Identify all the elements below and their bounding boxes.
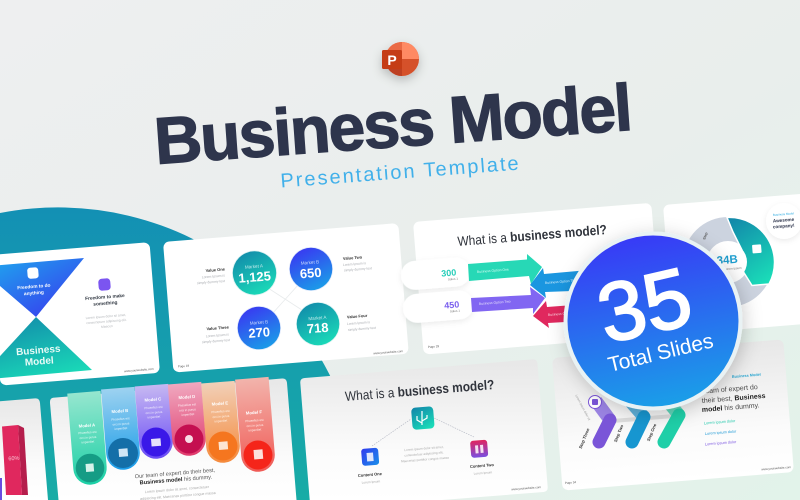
panel: bar chart slide <box>0 398 48 500</box>
chevron: blue <box>630 401 644 442</box>
pill 300: 300 <box>441 267 457 279</box>
callout bubble: Business Model <box>773 211 795 217</box>
column: model D: Phasellus est <box>178 402 196 408</box>
market C circle: Market B <box>250 319 268 326</box>
website: www.yourwebsite.com <box>124 367 154 373</box>
value three <box>202 324 230 344</box>
donut centre value: 34B <box>716 254 738 267</box>
centre description <box>401 445 449 463</box>
total slides label: Total Slides <box>606 329 716 377</box>
market D circle: 718 <box>306 320 329 336</box>
body text: Our team of expert do <box>690 384 758 396</box>
subtitle: Presentation Template <box>280 153 521 192</box>
arrow: blue: Business Option Three <box>545 278 580 285</box>
coloured list: Lorem ipsum dolor <box>705 440 737 446</box>
coloured list: Lorem ipsum dolor <box>705 429 737 436</box>
PowerPoint icon <box>382 42 419 76</box>
heading: What is a business model? <box>344 376 495 404</box>
market B circle <box>289 247 333 291</box>
badge: 35 total slides <box>564 232 742 410</box>
value three: Lorem Ipsum is <box>206 332 229 338</box>
coloured list <box>704 419 737 446</box>
lower triangle <box>0 317 92 380</box>
bar: red 60 percent: 60% <box>8 456 20 462</box>
footer <box>565 465 792 485</box>
freedom description <box>85 313 127 329</box>
panel: chevron steps slide <box>552 339 794 491</box>
step labels: Step One <box>646 422 658 442</box>
panel: six model columns slide <box>50 377 296 500</box>
value four: Value Four <box>347 313 368 319</box>
content two label: Lorem Ipsum <box>473 470 493 476</box>
column: model F: Model F <box>246 409 263 416</box>
freedom heading: Freedom to make <box>85 293 125 302</box>
market D circle: Market A <box>308 315 328 321</box>
icon: content one tile <box>361 448 379 466</box>
market A circle <box>232 250 277 296</box>
callout bubble: company! <box>773 223 795 229</box>
content one label: Lorem Ipsum <box>361 479 381 485</box>
column: model D: orci in purus <box>179 407 196 413</box>
donut centre value <box>716 254 742 271</box>
column: model B: Phasellus est <box>111 416 130 422</box>
number 35: 35 <box>589 250 700 361</box>
column: model B: Model B <box>111 408 128 414</box>
panel: donut slide <box>663 191 800 335</box>
team text: Business model his dummy. <box>139 475 213 486</box>
body text: model his dummy. <box>702 402 760 414</box>
footer: Page 19 <box>178 364 190 368</box>
market D circle <box>296 302 340 346</box>
team text: Our team of expert do their best, <box>135 468 216 480</box>
body text: their best, Business <box>702 393 766 405</box>
value two: simply dummy text <box>344 266 372 272</box>
icon: centre tile <box>411 406 435 430</box>
value three: Value Three <box>206 324 230 331</box>
value two <box>343 254 372 272</box>
donut centre value: Lorem ipsum <box>724 266 742 271</box>
teal background arc <box>0 207 362 500</box>
icon: purple tile <box>98 278 111 291</box>
freedom description: consectetuer adipiscing elit. <box>86 318 127 325</box>
column: model B: orci in purus <box>112 421 130 427</box>
team text <box>135 468 216 500</box>
column: model A <box>67 391 108 486</box>
donut chart: Step <box>702 232 709 240</box>
PowerPoint icon: P <box>387 52 397 68</box>
freedom description: Lorem ipsum dolor sit amet, <box>85 313 126 320</box>
step note: Lorem ipsum dolor sit <box>574 394 591 421</box>
value four <box>347 313 376 332</box>
heading: What is a business model? <box>457 221 608 249</box>
coloured list: Lorem ipsum dolor <box>704 419 736 425</box>
centre description: consectetuer adipiscing elit. <box>404 450 444 458</box>
arrow: red <box>533 301 600 328</box>
centre description: Maecenas porttitor congue massa <box>401 456 449 463</box>
title: Business Model <box>152 70 633 178</box>
freedom description: Maecen <box>101 324 113 329</box>
column: model C <box>135 384 174 460</box>
content two label: Content Two <box>470 462 495 469</box>
business model label <box>16 344 61 369</box>
arrow: teal <box>468 254 542 284</box>
column: model C: imperdiet <box>147 414 161 420</box>
column: model B <box>101 387 141 471</box>
column: model C: Model C <box>144 396 161 403</box>
arrow: red: Business Option Four <box>548 310 581 317</box>
footer: Page 34 <box>565 480 577 485</box>
icon: content two tile <box>470 440 488 458</box>
column: model A: orci in purus <box>79 435 97 440</box>
content two label <box>470 462 495 476</box>
value four: Lorem Ipsum is <box>347 320 370 326</box>
website: www.yourwebsite.com <box>511 485 542 491</box>
pill 300 <box>400 256 471 291</box>
market B circle: 650 <box>299 265 322 281</box>
column: model D: Model D <box>178 394 195 400</box>
arrow: purple <box>471 287 545 314</box>
step labels <box>578 422 658 449</box>
arrow: blue <box>530 268 600 298</box>
market C circle: 270 <box>248 324 271 341</box>
value one <box>197 266 226 285</box>
column: model E <box>201 381 241 464</box>
value four: simply dummy text <box>348 326 376 332</box>
icon: step badge <box>588 396 602 408</box>
body text <box>690 384 766 414</box>
column: model D <box>168 382 207 457</box>
column: model E: Model E <box>211 400 228 407</box>
column: model F: Phasellus est <box>245 418 264 423</box>
triangle label: Freedom to do <box>17 283 51 291</box>
page number: Page 29 <box>428 344 440 349</box>
freedom heading: something <box>93 300 118 308</box>
column: model E: Phasellus est <box>211 409 230 414</box>
column: model C: Phasellus est <box>144 405 163 410</box>
value one: Value One <box>205 266 226 273</box>
footer: www.yourwebsite.com <box>373 349 404 355</box>
content one label <box>358 471 383 485</box>
market C circle <box>237 306 281 350</box>
arrow: teal: Business Option One <box>477 267 509 274</box>
value two: Value Two <box>343 254 363 261</box>
heading label: Business Model <box>732 373 761 379</box>
step labels: Step Three <box>578 427 591 449</box>
arrow: purple: Business Option Two <box>479 299 511 306</box>
column: model F <box>235 377 276 473</box>
callout bubble <box>766 203 800 239</box>
value two: Lorem Ipsum is <box>343 261 366 267</box>
team text: Lorem ipsum dolor sit amet, consectetuer <box>145 485 210 494</box>
panel: content network slide <box>300 359 548 500</box>
column: model D: imperdiet <box>181 412 195 417</box>
callout bubble: Awesome <box>773 217 795 223</box>
panel: hourglass slide <box>0 242 160 386</box>
pill 450: 450 <box>444 299 460 311</box>
market A circle: Market A <box>245 263 264 270</box>
pill 450: Sales 1 <box>450 309 460 313</box>
donut chart <box>695 217 775 295</box>
value one: simply dummy text <box>197 279 225 285</box>
step labels: Step Two <box>613 424 625 443</box>
chevron: purple <box>596 401 610 442</box>
value one: Lorem Ipsum is <box>202 273 225 279</box>
business model label: Business <box>16 344 61 358</box>
column: model A: Phasellus est <box>78 430 97 435</box>
footer: www.yourwebsite.com <box>761 465 792 471</box>
column: model A: imperdiet <box>81 439 95 445</box>
footer <box>178 349 404 368</box>
market A circle: 1,125 <box>238 268 271 286</box>
panel: what is a business model arrows <box>400 203 662 355</box>
column: model B: imperdiet <box>114 426 128 431</box>
column: model C: orci in purus <box>145 410 163 415</box>
chevron: teal <box>664 398 679 442</box>
column: model E: orci in purus <box>212 414 230 419</box>
panel: market circles slide <box>163 223 409 373</box>
column: model E: imperdiet <box>214 418 228 424</box>
market B circle: Market B <box>301 259 319 266</box>
value three: simply dummy text <box>202 338 230 344</box>
column: model F: orci in purus <box>246 423 264 428</box>
inverted triangle <box>0 258 84 317</box>
column: model A: Model A <box>78 422 95 429</box>
centre description: Lorem ipsum dolor sit amet, <box>404 445 444 452</box>
content one label: Content One <box>358 471 383 478</box>
pill 450 <box>402 289 474 324</box>
icon: infinity tile <box>27 267 39 279</box>
freedom heading <box>85 293 125 308</box>
bar: purple <box>0 478 2 500</box>
triangle label <box>17 283 51 297</box>
pill 300: Sales 1 <box>448 277 458 281</box>
triangle label: anything <box>24 290 44 297</box>
column: model F: imperdiet <box>248 427 262 433</box>
business model label: Model <box>24 355 54 369</box>
